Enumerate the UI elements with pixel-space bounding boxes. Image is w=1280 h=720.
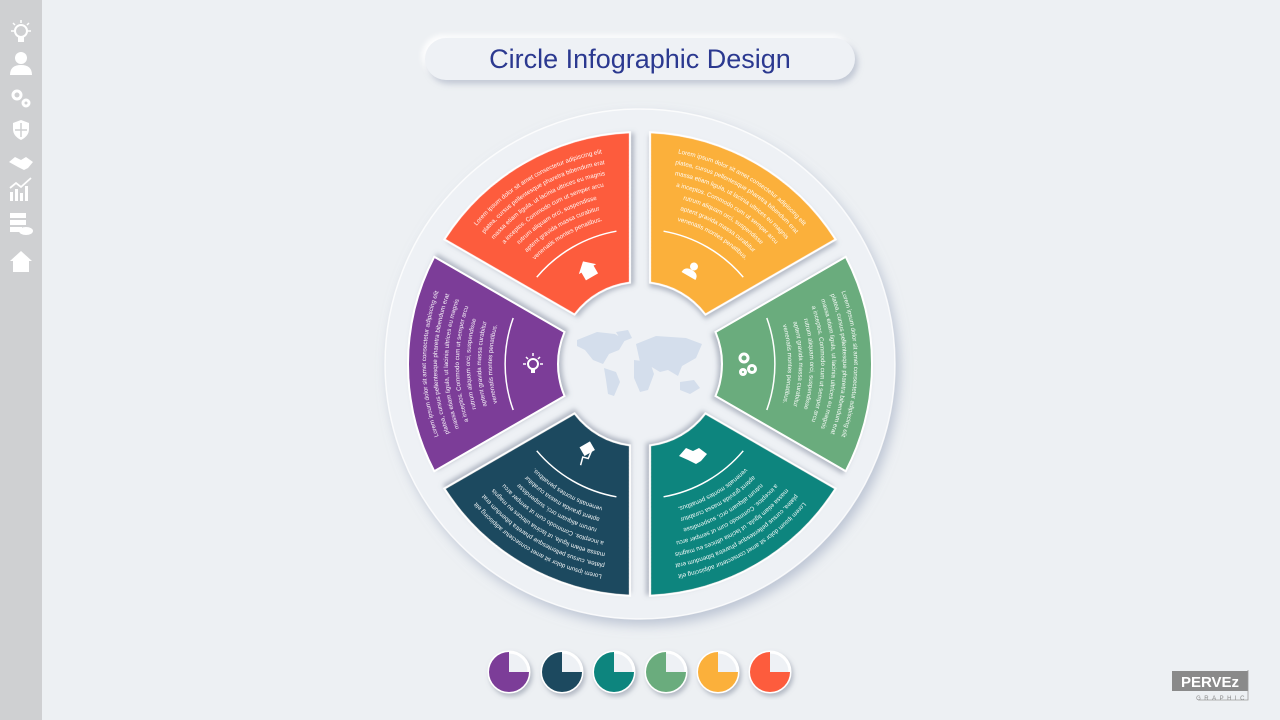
sidebar bbox=[0, 0, 42, 720]
title bbox=[425, 38, 855, 80]
icon: person bbox=[682, 259, 703, 280]
segment: teal bbox=[585, 376, 849, 618]
outer disk bbox=[385, 109, 895, 619]
icon: user bbox=[10, 52, 32, 75]
logo: GRAPHIC bbox=[1196, 696, 1248, 702]
icon: gears bbox=[740, 354, 756, 374]
icon: hand chart bbox=[573, 441, 598, 465]
world map bbox=[577, 330, 702, 396]
icon: gears bbox=[13, 91, 29, 106]
title: Circle Infographic Design bbox=[489, 44, 791, 74]
icon: chart bbox=[10, 178, 31, 201]
logo bbox=[1172, 670, 1248, 702]
icon: handshake bbox=[9, 157, 33, 170]
icon: idea bulb bbox=[523, 353, 543, 373]
icon: servers cloud bbox=[10, 213, 33, 235]
icon: lightbulb bbox=[11, 20, 31, 42]
segment: red bbox=[431, 110, 695, 352]
segment: navy bbox=[431, 376, 695, 618]
icon: home bbox=[10, 251, 32, 272]
legend circles bbox=[489, 652, 790, 692]
segment: green bbox=[716, 257, 872, 471]
segment: purple bbox=[408, 257, 564, 471]
logo: PERVEz bbox=[1181, 674, 1239, 691]
icon: handshake bbox=[679, 448, 707, 464]
icon: shield bbox=[13, 120, 29, 140]
icon: house bbox=[574, 256, 601, 282]
segment: orange bbox=[585, 110, 849, 352]
